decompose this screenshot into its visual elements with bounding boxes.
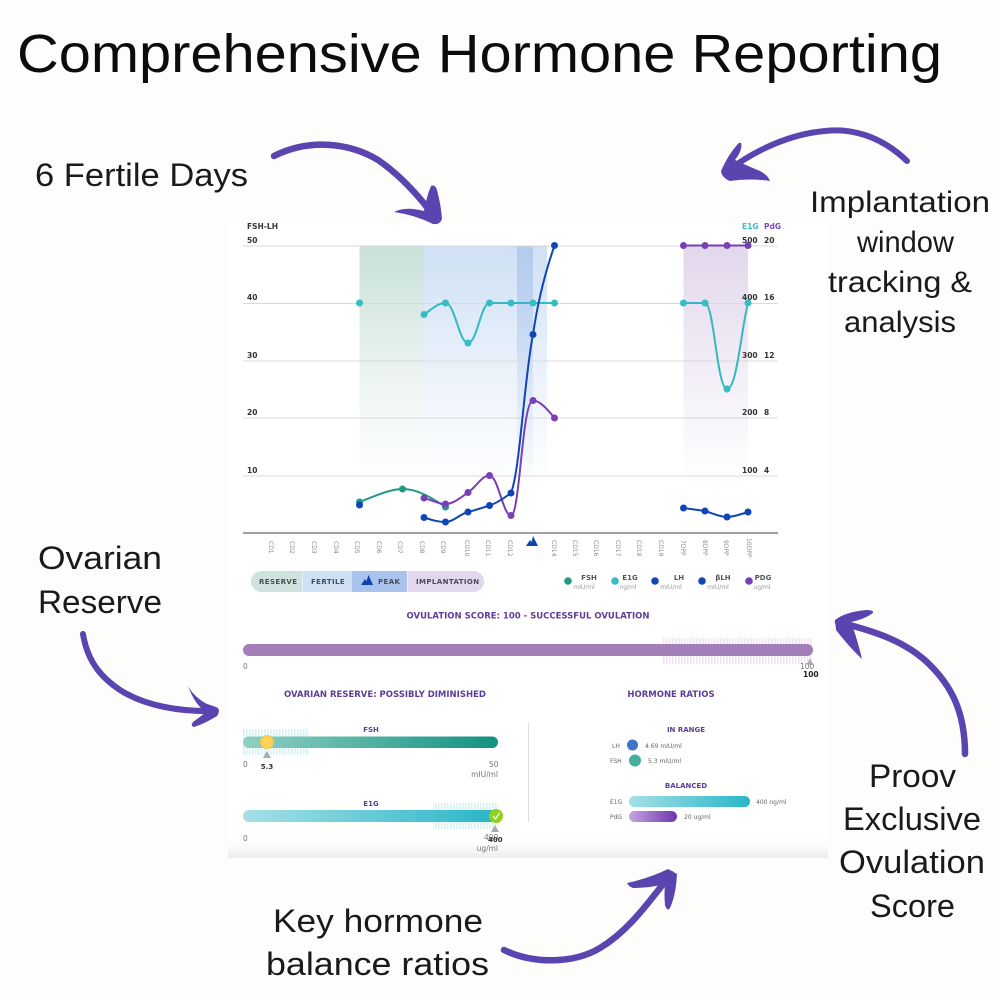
x axis labels: CD15 xyxy=(571,540,578,557)
legend: hormones: βLH xyxy=(715,574,731,582)
x axis labels: CD7 xyxy=(396,541,403,554)
right axis labels: 400 xyxy=(742,293,758,302)
x axis labels: 7DPP xyxy=(679,540,686,556)
chart: hormone ratios: 400 ng/ml xyxy=(756,799,787,806)
band: fertile xyxy=(424,246,547,486)
chart: E1G gauge: E1G xyxy=(363,800,379,808)
x axis labels: CD18 xyxy=(635,540,642,557)
left axis labels xyxy=(247,222,278,475)
label: exclusive ovulation score: Proov xyxy=(869,758,956,794)
legend: phases: RESERVE xyxy=(259,578,297,586)
left axis labels: 50 xyxy=(247,236,257,245)
legend: hormones: E1G xyxy=(622,574,638,582)
band: reserve xyxy=(360,246,424,486)
chart: hormone ratios: FSH xyxy=(610,758,622,765)
legend: hormones: mIU/ml xyxy=(660,584,682,591)
legend: phases xyxy=(251,571,484,592)
arrow: to implantation window xyxy=(721,130,907,181)
label: key hormone balance ratios: balance ratios xyxy=(266,946,489,982)
chart: E1G gauge: 0 xyxy=(243,834,248,843)
x axis labels: CD16 xyxy=(592,540,599,557)
chart: hormone ratios: 4.69 mIU/ml xyxy=(645,743,682,750)
label: ovarian reserve: Ovarian xyxy=(38,540,162,576)
heading: ovulation score: OVULATION SCORE: 100 - SUCCESSFUL OVULATION xyxy=(407,612,649,622)
right axis labels: 4 xyxy=(764,466,769,475)
chart: hormone ratios: E1G xyxy=(610,799,623,806)
legend: phases: FERTILE xyxy=(311,578,345,586)
right axis labels: 12 xyxy=(764,351,774,360)
chart: E1G gauge: ug/ml xyxy=(477,844,498,853)
right axis labels: 20 xyxy=(764,236,774,245)
chart: ovulation score bar xyxy=(243,638,819,679)
right axis labels: PdG xyxy=(764,222,781,231)
legend: hormones xyxy=(564,574,772,591)
x axis labels xyxy=(267,538,752,558)
x axis labels: 10DPP xyxy=(745,538,752,558)
legend: hormones: ng/ml xyxy=(619,584,637,591)
chart: FSH gauge: mIU/ml xyxy=(471,770,498,779)
legend: hormones: mIU/ml xyxy=(573,584,595,591)
arrow: to fertile days xyxy=(274,145,442,224)
x axis labels: CD10 xyxy=(463,540,470,557)
label: exclusive ovulation score: Ovulation xyxy=(839,844,985,880)
x axis labels: 8DPP xyxy=(701,540,708,556)
chart: E1G gauge: 400 xyxy=(484,833,499,842)
label: ovarian reserve: Reserve xyxy=(38,584,162,620)
x axis labels: CD12 xyxy=(506,540,513,557)
line: FSH xyxy=(356,486,449,510)
x axis labels: CD2 xyxy=(288,541,295,554)
label: key hormone balance ratios: Key hormone xyxy=(273,903,483,939)
chart: FSH gauge: FSH xyxy=(363,726,379,734)
x axis labels: CD3 xyxy=(310,541,317,554)
right axis labels: 100 xyxy=(742,466,758,475)
arrow: to ovulation score xyxy=(835,610,965,754)
band: implantation xyxy=(684,246,748,486)
chart: hormone ratios: 20 ug/ml xyxy=(684,814,711,821)
legend: hormones: mIU/ml xyxy=(707,584,729,591)
x axis labels: CD17 xyxy=(614,540,621,557)
chart: E1G gauge xyxy=(243,800,503,853)
left axis labels: 30 xyxy=(247,351,257,360)
chart: hormone ratios: 5.3 mIU/ml xyxy=(648,758,681,765)
chart: FSH gauge: 5.3 xyxy=(261,763,273,771)
right axis labels: 500 xyxy=(742,236,758,245)
arrow: to hormone ratios xyxy=(504,869,677,960)
chart: hormone ratios: IN RANGE xyxy=(667,726,705,734)
left axis labels: FSH-LH xyxy=(247,222,278,231)
label: exclusive ovulation score: Exclusive xyxy=(843,801,981,837)
left axis labels: 20 xyxy=(247,408,257,417)
right axis labels: 16 xyxy=(764,293,774,302)
label: implantation window: tracking & xyxy=(828,266,972,299)
chart: hormone ratios: BALANCED xyxy=(665,782,707,790)
x axis labels: CD14 xyxy=(550,540,557,557)
x axis labels: CD5 xyxy=(353,541,360,554)
chart: hormone ratios xyxy=(610,726,787,822)
chart: ovulation score bar: 100 xyxy=(803,670,819,679)
line: PdG xyxy=(420,242,752,519)
legend: hormones: PDG xyxy=(755,574,772,582)
label: exclusive ovulation score: Score xyxy=(870,888,955,924)
title: Comprehensive Hormone Reporting xyxy=(17,24,942,84)
line: E1G xyxy=(356,300,752,392)
band: peak xyxy=(517,246,533,486)
chart: hormone ratios: PdG xyxy=(610,814,622,821)
left axis labels: 40 xyxy=(247,293,257,302)
heading: hormone ratios: HORMONE RATIOS xyxy=(627,690,715,700)
heading: ovarian reserve: OVARIAN RESERVE: POSSIBLY DIMINISHED xyxy=(284,690,486,700)
right axis labels: 8 xyxy=(764,408,769,417)
x axis labels: CD8 xyxy=(418,541,425,554)
right axis labels: E1G xyxy=(742,222,758,231)
x axis labels: CD19 xyxy=(657,540,664,557)
x axis labels: CD9 xyxy=(439,541,446,554)
label: implantation window: window xyxy=(856,226,954,259)
chart: ovulation score bar: 0 xyxy=(243,662,248,671)
chart: FSH gauge: 50 xyxy=(489,760,499,769)
right axis labels: 200 xyxy=(742,408,758,417)
label: key hormone balance ratios xyxy=(266,903,489,982)
label: 6 Fertile Days: 6 Fertile Days xyxy=(35,157,248,193)
legend: hormones: LH xyxy=(674,574,684,582)
label: ovarian reserve xyxy=(38,540,162,620)
right axis labels xyxy=(742,222,781,475)
chart: ovulation score bar: 100 xyxy=(800,662,815,671)
line: LH xyxy=(356,242,752,526)
label: implantation window: Implantation xyxy=(810,186,990,219)
chart: FSH gauge: 0 xyxy=(243,760,248,769)
panel: hormone report xyxy=(228,222,828,858)
icon: peak marker xyxy=(526,536,538,546)
right axis labels: 300 xyxy=(742,351,758,360)
x axis labels: CD6 xyxy=(375,541,382,554)
left axis labels: 10 xyxy=(247,466,257,475)
chart: hormone line chart xyxy=(243,222,781,558)
chart: E1G gauge: 400 xyxy=(488,836,503,844)
legend: hormones: ug/ml xyxy=(753,584,771,591)
label: implantation window xyxy=(810,186,990,339)
legend: phases: PEAK xyxy=(378,578,401,586)
chart: FSH gauge xyxy=(243,726,499,779)
label: implantation window: analysis xyxy=(844,306,956,339)
label: exclusive ovulation score xyxy=(839,758,985,924)
arrow: to ovarian reserve xyxy=(83,634,219,727)
x axis labels: CD11 xyxy=(484,540,491,557)
x axis labels: 9DPP xyxy=(722,540,729,556)
legend: hormones: FSH xyxy=(581,574,597,582)
chart: hormone ratios: LH xyxy=(612,743,620,750)
x axis labels: CD4 xyxy=(332,541,339,554)
legend: phases: IMPLANTATION xyxy=(416,578,480,586)
x axis labels: CD1 xyxy=(267,541,274,554)
